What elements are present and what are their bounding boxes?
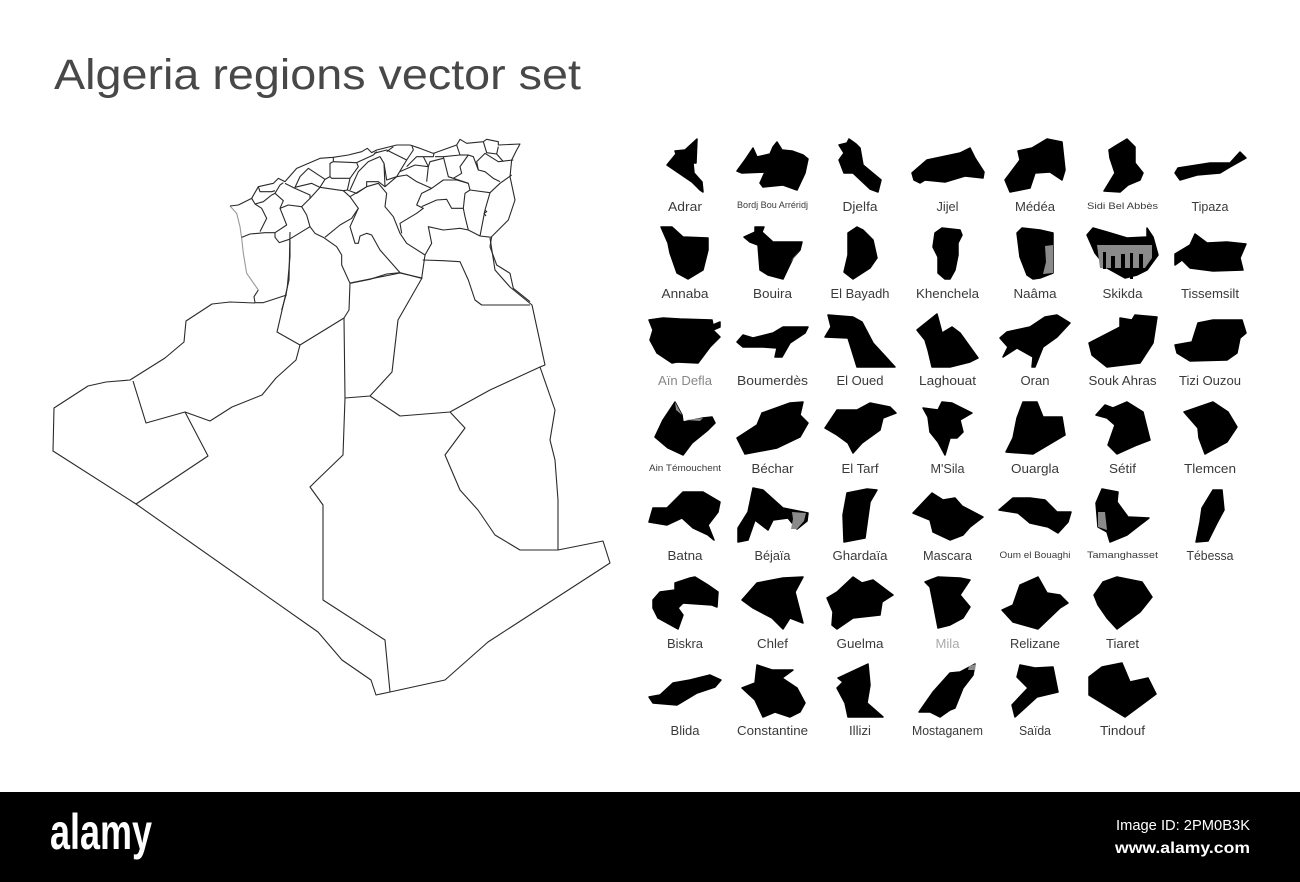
region: Bouira (744, 227, 802, 301)
region: Aïn Témouchent: Ain Témouchent (649, 463, 721, 474)
region: Jijel: Jijel (936, 200, 958, 214)
region: Bordj Bou Arréridj: Bordj Bou Arréridj (737, 200, 808, 211)
region: Aïn Defla (649, 318, 720, 388)
region: Relizane: Relizane (1010, 637, 1060, 651)
region: El Bayadh: El Bayadh (830, 287, 890, 301)
region: Biskra: Biskra (667, 637, 703, 651)
region: Mila (925, 577, 970, 651)
region: Guelma (827, 577, 893, 651)
region: Tindouf (1089, 663, 1156, 738)
region: M'Sila: M'Sila (930, 462, 965, 476)
region: Souk Ahras: Souk Ahras (1088, 374, 1156, 388)
region: Aïn Témouchent (649, 402, 721, 474)
region: Batna (649, 492, 720, 563)
region: Béjaïa: Béjaïa (754, 549, 791, 563)
region: Oran (1000, 315, 1070, 388)
region: Jijel (912, 148, 984, 214)
region: El Bayadh (830, 227, 890, 301)
region: Bouira: Bouira (753, 287, 792, 301)
region: Naâma (1014, 228, 1057, 301)
website: www.alamy.com (1114, 840, 1250, 857)
region: Mascara (913, 493, 983, 563)
region: Laghouat: Laghouat (919, 374, 977, 388)
region: Boumerdès (737, 327, 808, 388)
region: Tlemcen: Tlemcen (1184, 462, 1236, 476)
region: Khenchela (916, 228, 979, 301)
region: Médéa: Médéa (1015, 200, 1055, 214)
region: Biskra (653, 577, 718, 651)
region: Mostaganem (912, 664, 983, 738)
region: Ghardaïa: Ghardaïa (832, 549, 888, 563)
map: Algeria regions outline (53, 139, 610, 695)
region: Mila: Mila (936, 637, 960, 651)
region: Tipaza (1175, 152, 1246, 214)
region: Ouargla: Ouargla (1011, 462, 1059, 476)
region: Mostaganem: Mostaganem (912, 724, 983, 738)
region: Skikda (1087, 228, 1158, 301)
region: Constantine (737, 665, 808, 738)
region: Annaba: Annaba (662, 287, 709, 301)
region: Naâma: Naâma (1014, 287, 1057, 301)
region: Tindouf: Tindouf (1100, 724, 1146, 738)
region: Tipaza: Tipaza (1192, 200, 1229, 214)
region: Tlemcen (1184, 402, 1237, 476)
region: Adrar: Adrar (668, 200, 702, 214)
region: Ouargla (1006, 402, 1065, 476)
region: Khenchela: Khenchela (916, 287, 979, 301)
region: Tamanghasset (1087, 489, 1158, 561)
region: Tizi Ouzou: Tizi Ouzou (1179, 374, 1241, 388)
region: El Tarf: El Tarf (842, 462, 879, 476)
region: Saïda: Saïda (1019, 724, 1051, 738)
region: Sidi Bel Abbès: Sidi Bel Abbès (1087, 201, 1158, 212)
region: Batna: Batna (668, 549, 703, 563)
footer bar (0, 792, 1300, 882)
region: Guelma: Guelma (836, 637, 884, 651)
region: Sétif (1096, 402, 1150, 476)
region: El Oued: El Oued (836, 374, 884, 388)
region: Bordj Bou Arréridj (737, 142, 808, 211)
region: El Oued (825, 315, 895, 388)
region: Djelfa (839, 139, 881, 214)
region: El Tarf (825, 403, 896, 476)
region: Ghardaïa (832, 489, 888, 563)
region: Béjaïa (738, 488, 808, 563)
region: Médéa (1005, 139, 1065, 214)
region: Skikda: Skikda (1102, 287, 1143, 301)
region: Tiaret: Tiaret (1106, 637, 1140, 651)
region: Chlef (742, 577, 803, 651)
region: Béchar: Béchar (752, 462, 794, 476)
region: Tiaret (1094, 577, 1152, 651)
region: Laghouat (917, 314, 978, 388)
region: Sidi Bel Abbès (1087, 139, 1158, 212)
region: Oran: Oran (1020, 374, 1050, 388)
region: Oum el Bouaghi (999, 498, 1071, 561)
region: Tizi Ouzou (1175, 320, 1246, 388)
region: Illizi (837, 664, 883, 738)
region: Saïda (1012, 665, 1058, 738)
region: Souk Ahras (1088, 315, 1157, 388)
image id: Image ID: 2PM0B3K (1116, 817, 1250, 834)
region: Béchar (737, 402, 808, 476)
region: Tissemsilt (1175, 234, 1246, 301)
region: Blida: Blida (670, 724, 700, 738)
region: Tébessa: Tébessa (1186, 549, 1234, 563)
region: Mascara: Mascara (923, 549, 972, 563)
region: Aïn Defla: Aïn Defla (658, 374, 712, 388)
region: Boumerdès: Boumerdès (737, 374, 808, 388)
title: Algeria regions vector set (54, 51, 581, 99)
region: Tébessa (1186, 490, 1234, 563)
region: Tissemsilt: Tissemsilt (1181, 287, 1240, 301)
region: Oum el Bouaghi: Oum el Bouaghi (1000, 550, 1070, 561)
region: Blida (649, 675, 721, 738)
region: Relizane (1002, 577, 1068, 651)
region: Illizi: Illizi (849, 724, 871, 738)
region: Tamanghasset: Tamanghasset (1087, 550, 1158, 561)
region: Chlef: Chlef (757, 637, 789, 651)
region: Djelfa: Djelfa (842, 200, 878, 214)
region: Constantine: Constantine (737, 724, 808, 738)
region: Annaba (661, 227, 709, 301)
region: Adrar (667, 139, 703, 214)
region: Sétif: Sétif (1109, 462, 1137, 476)
region: M'Sila (923, 402, 972, 476)
logo: alamy: alamy (50, 804, 152, 860)
